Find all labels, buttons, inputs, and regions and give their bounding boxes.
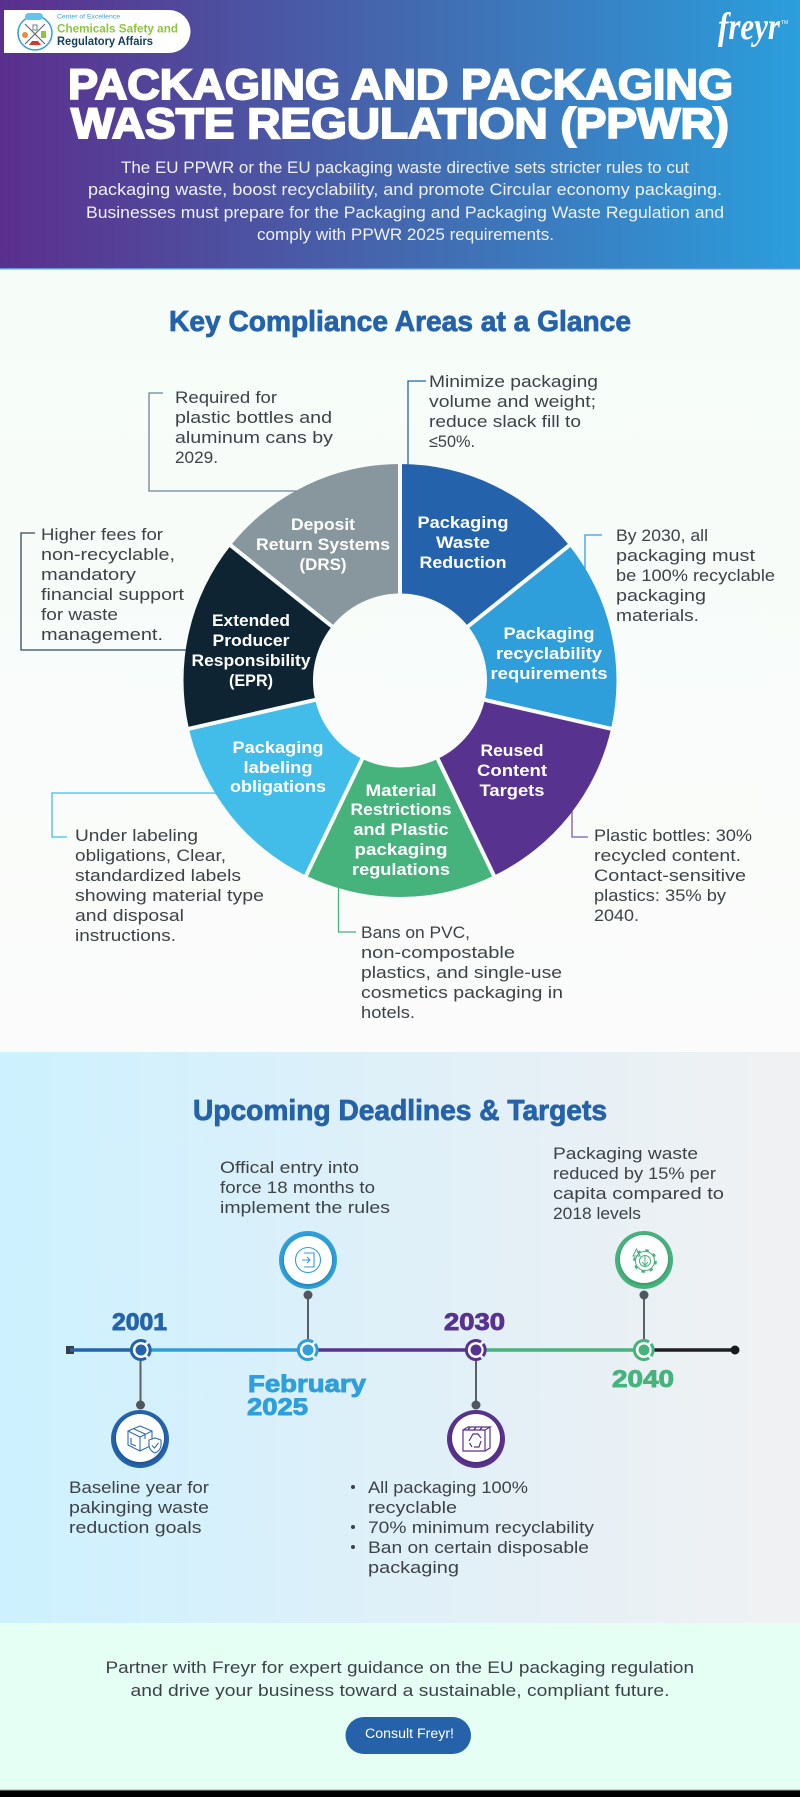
segment: deposit return systems: Return Systems bbox=[256, 535, 390, 554]
text: 2030 bullets bbox=[351, 1478, 595, 1577]
segment: material restrictions: and Plastic bbox=[354, 820, 448, 839]
segment: extended producer responsibility: Extended bbox=[212, 611, 290, 630]
text: partner with freyr: and drive your business toward a sustainable, compliant future. bbox=[130, 1681, 670, 1700]
segment: packaging labeling obligations: obligations bbox=[230, 777, 326, 796]
text: official entry bbox=[220, 1158, 390, 1217]
year: 2001: 2001 bbox=[112, 1309, 167, 1336]
callout: labeling: instructions. bbox=[75, 926, 176, 945]
milestone: 2030 bbox=[351, 1309, 595, 1577]
timeline axis bbox=[66, 1346, 740, 1354]
callout: recyclability bbox=[585, 526, 775, 625]
text: baseline year bbox=[69, 1478, 209, 1537]
heading: key compliance areas: Key Compliance Areas at a Glance bbox=[169, 306, 631, 338]
callout: reused content: recycled content. bbox=[594, 846, 741, 865]
segment: deposit return systems: (DRS) bbox=[300, 555, 346, 574]
callout: extended producer responsibility: mandatory bbox=[41, 565, 137, 584]
callout: labeling: standardized labels bbox=[75, 866, 241, 885]
text: baseline year: reduction goals bbox=[69, 1518, 202, 1537]
text: 2030 bullets: recyclable bbox=[368, 1498, 457, 1517]
year: february 2025: 2025 bbox=[247, 1394, 308, 1421]
text: official entry: implement the rules bbox=[220, 1198, 390, 1217]
title: WASTE REGULATION (PPWR) bbox=[71, 100, 729, 148]
intro text: packaging waste, boost recyclability, and promote Circular economy packaging. bbox=[88, 180, 722, 199]
footer bar bbox=[0, 1790, 800, 1797]
segment: reused content targets: Targets bbox=[480, 781, 544, 800]
text: partner with freyr bbox=[106, 1658, 694, 1700]
segment: packaging waste reduction: Waste bbox=[436, 533, 490, 552]
intro text: The EU PPWR or the EU packaging waste directive sets stricter rules to cut bbox=[121, 158, 689, 177]
callout: packaging waste reduction: reduce slack fill to bbox=[429, 412, 581, 431]
callout: extended producer responsibility: Higher fees for bbox=[41, 525, 163, 544]
segment: packaging waste reduction bbox=[400, 464, 569, 626]
segment: packaging waste reduction: Reduction bbox=[420, 553, 506, 572]
title: PACKAGING AND PACKAGING bbox=[68, 61, 733, 109]
icon: recyclable box bbox=[447, 1410, 505, 1468]
text: waste reduced bbox=[553, 1144, 724, 1223]
year: 2040: 2040 bbox=[612, 1366, 674, 1393]
intro text: Businesses must prepare for the Packaging and Packaging Waste Regulation and bbox=[86, 203, 724, 222]
milestone: 2001 bbox=[69, 1309, 209, 1537]
callout: deposit return systems: aluminum cans by bbox=[175, 428, 334, 447]
segment: packaging waste reduction: Packaging bbox=[418, 513, 508, 532]
segment: material restrictions: packaging bbox=[354, 840, 448, 859]
intro text bbox=[86, 158, 724, 244]
segment: extended producer responsibility: Producer bbox=[212, 631, 290, 650]
callout: packaging waste reduction bbox=[408, 372, 598, 470]
segment: reused content targets: Content bbox=[477, 761, 547, 780]
year: february 2025: February bbox=[248, 1371, 367, 1398]
text: partner with freyr: Partner with Freyr for expert guidance on the EU packaging regulation bbox=[106, 1658, 694, 1677]
segment: deposit return systems: Deposit bbox=[291, 515, 355, 534]
callout: recyclability: be 100% recyclable bbox=[616, 566, 775, 585]
segment: extended producer responsibility: (EPR) bbox=[229, 671, 273, 690]
callout: recyclability: By 2030, all bbox=[616, 526, 708, 545]
icon: entry into force bbox=[279, 1231, 337, 1289]
callout: reused content: plastics: 35% by bbox=[594, 886, 727, 905]
callout: deposit return systems: plastic bottles and bbox=[175, 408, 332, 427]
callout: packaging waste reduction: volume and weight; bbox=[429, 392, 596, 411]
panel: deadlines and targets bbox=[0, 1052, 800, 1623]
segment: packaging labeling obligations bbox=[189, 700, 362, 876]
segment: reused content targets bbox=[438, 700, 611, 876]
text: 2030 bullets: packaging bbox=[368, 1558, 459, 1577]
callout: deposit return systems: Required for bbox=[175, 388, 277, 407]
callout: labeling: showing material type bbox=[75, 886, 264, 905]
year: 2030: 2030 bbox=[444, 1309, 505, 1336]
callout: extended producer responsibility: financial support bbox=[41, 585, 184, 604]
segment: material restrictions: regulations bbox=[352, 860, 450, 879]
callout: labeling: Under labeling bbox=[75, 826, 198, 845]
segment: deposit return systems bbox=[231, 464, 400, 626]
text: waste reduced: reduced by 15% per bbox=[553, 1164, 716, 1183]
segment: material restrictions: Material bbox=[366, 781, 436, 800]
text: baseline year: Baseline year for bbox=[69, 1478, 209, 1497]
logo: freyr: TM bbox=[781, 20, 788, 26]
callout: labeling: and disposal bbox=[75, 906, 184, 925]
text: official entry: Offical entry into bbox=[220, 1158, 359, 1177]
callout: material restrictions: hotels. bbox=[361, 1003, 415, 1022]
text: 2030 bullets: All packaging 100% bbox=[368, 1478, 528, 1497]
callout: material restrictions bbox=[338, 885, 563, 1022]
callout: material restrictions: non-compostable bbox=[361, 943, 515, 962]
callout: labeling bbox=[52, 793, 264, 945]
text: baseline year: pakinging waste bbox=[69, 1498, 209, 1517]
segment: packaging labeling obligations: labeling bbox=[244, 758, 312, 777]
donut chart bbox=[184, 461, 616, 897]
segment: packaging recyclability requirements bbox=[468, 546, 616, 729]
callout: material restrictions: cosmetics packaging in bbox=[361, 983, 563, 1002]
segment: material restrictions bbox=[306, 759, 494, 897]
callout: recyclability: materials. bbox=[616, 606, 699, 625]
callout: deposit return systems: 2029. bbox=[175, 448, 218, 467]
button: consult freyr: Consult Freyr! bbox=[365, 1726, 454, 1741]
callout: extended producer responsibility: management. bbox=[41, 625, 163, 644]
text: waste reduced: capita compared to bbox=[553, 1184, 724, 1203]
callout: labeling: obligations, Clear, bbox=[75, 846, 226, 865]
segment: extended producer responsibility: Responsibility bbox=[192, 651, 311, 670]
logo: chemicals safety and regulatory affairs: Chemicals Safety and bbox=[57, 24, 178, 36]
text: 2030 bullets: 70% minimum recyclability bbox=[368, 1518, 595, 1537]
callout: reused content: 2040. bbox=[594, 906, 639, 925]
heading: deadlines: Upcoming Deadlines & Targets bbox=[193, 1095, 607, 1127]
button: consult freyr bbox=[346, 1717, 471, 1754]
logo: chemicals safety and regulatory affairs bbox=[4, 10, 190, 53]
callout: reused content bbox=[572, 808, 752, 925]
callout: recyclability: packaging bbox=[616, 586, 706, 605]
milestone: february 2025 bbox=[220, 1158, 390, 1421]
callout: reused content: Contact-sensitive bbox=[594, 866, 746, 885]
callout: reused content: Plastic bottles: 30% bbox=[594, 826, 752, 845]
callout: extended producer responsibility: for waste bbox=[41, 605, 118, 624]
header band bbox=[0, 0, 800, 270]
callout: deposit return systems bbox=[149, 388, 334, 491]
year: february 2025 bbox=[247, 1371, 367, 1421]
logo: freyr: freyr bbox=[718, 6, 781, 48]
callout: packaging waste reduction: Minimize packaging bbox=[429, 372, 598, 391]
segment: extended producer responsibility bbox=[184, 546, 332, 729]
segment: reused content targets: Reused bbox=[480, 741, 544, 760]
callout: material restrictions: Bans on PVC, bbox=[361, 923, 470, 942]
panel: key compliance areas bbox=[0, 270, 800, 1052]
callout: packaging waste reduction: ≤50%. bbox=[429, 432, 475, 451]
segment: packaging recyclability requirements: Packaging bbox=[504, 624, 594, 643]
callout: recyclability: packaging must bbox=[616, 546, 755, 565]
text: official entry: force 18 months to bbox=[220, 1178, 375, 1197]
icon: gear with down arrow bbox=[615, 1231, 673, 1289]
text: 2030 bullets: Ban on certain disposable bbox=[368, 1538, 589, 1557]
segment: packaging recyclability requirements: recyclability bbox=[496, 644, 603, 663]
segment: material restrictions: Restrictions bbox=[350, 800, 452, 819]
callout: extended producer responsibility bbox=[21, 525, 190, 650]
logo: chemicals safety and regulatory affairs: Center of Excellence bbox=[57, 14, 120, 20]
callout: material restrictions: plastics, and single-use bbox=[361, 963, 562, 982]
intro text: comply with PPWR 2025 requirements. bbox=[257, 225, 554, 244]
icon: box with shield bbox=[111, 1410, 169, 1468]
panel: call to action bbox=[0, 1623, 800, 1790]
title bbox=[68, 61, 733, 148]
callout: extended producer responsibility: non-recyclable, bbox=[41, 545, 175, 564]
segment: packaging labeling obligations: Packaging bbox=[232, 738, 324, 757]
text: waste reduced: 2018 levels bbox=[553, 1204, 641, 1223]
segment: packaging recyclability requirements: requirements bbox=[490, 664, 608, 683]
text: waste reduced: Packaging waste bbox=[553, 1144, 698, 1163]
logo: chemicals safety and regulatory affairs: Regulatory Affairs bbox=[57, 36, 153, 48]
milestone: 2040 bbox=[553, 1144, 724, 1393]
